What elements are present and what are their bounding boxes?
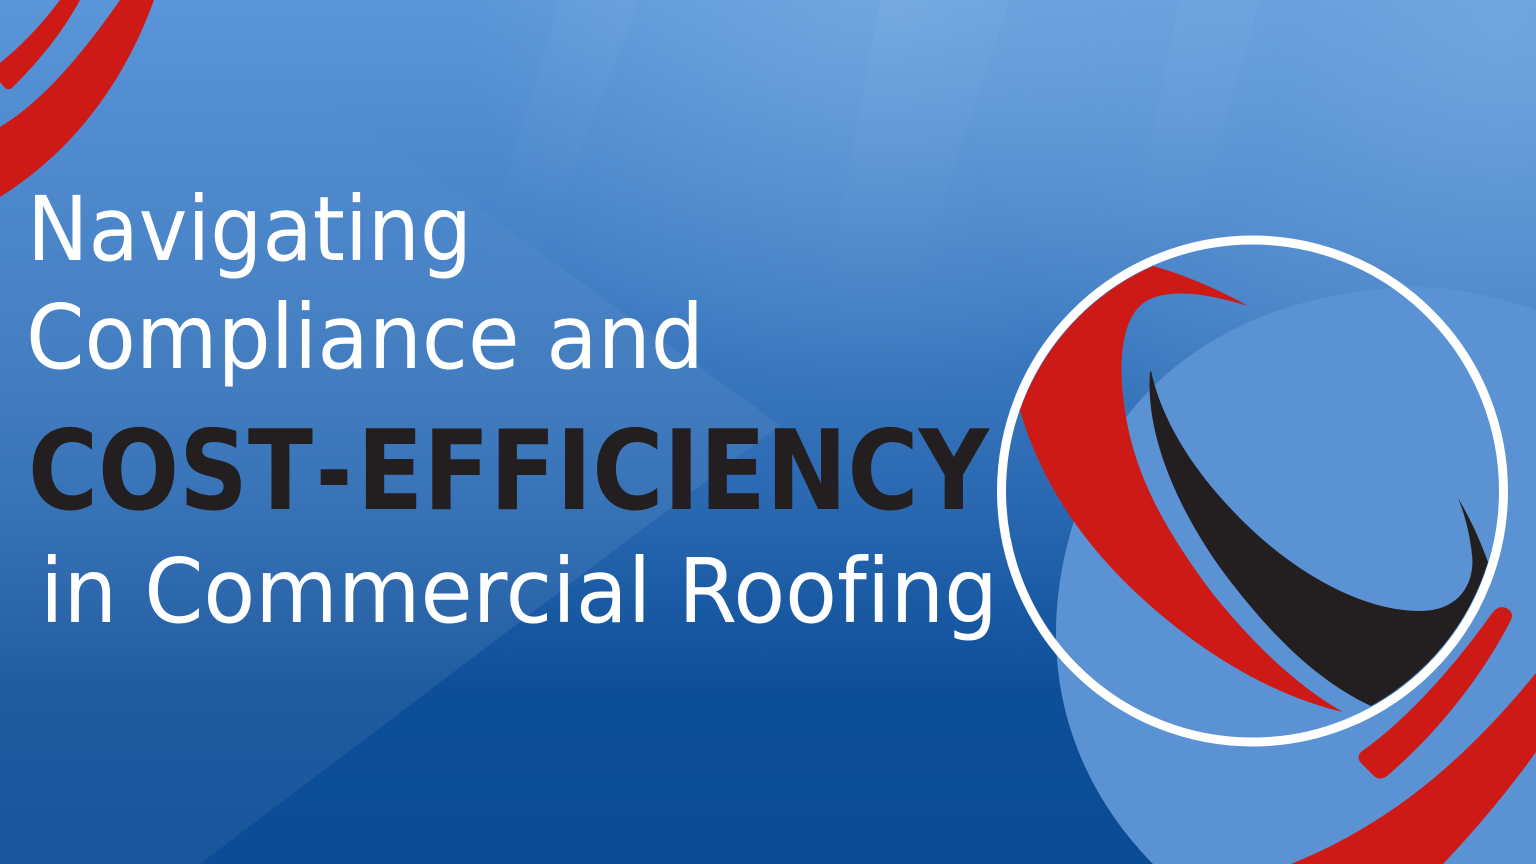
logo ring bbox=[1002, 240, 1504, 742]
small bar bbox=[1358, 607, 1512, 778]
title line 3 emphasis: EFFICIENCY bbox=[357, 407, 990, 536]
light blue backdrop circle bbox=[1056, 287, 1536, 864]
title line 3 emphasis: COST bbox=[28, 407, 313, 536]
large arc bbox=[0, 0, 154, 197]
title line 3 emphasis: - bbox=[316, 407, 352, 536]
logo red swoosh bbox=[1020, 266, 1343, 712]
large arc bbox=[1291, 673, 1536, 864]
logo black swoosh bbox=[1150, 371, 1488, 706]
title line 4: in Commercial Roofing bbox=[40, 539, 998, 643]
title line 3 emphasis bbox=[28, 407, 990, 536]
top-left red arcs bbox=[0, 0, 154, 197]
title line 1: Navigating bbox=[27, 177, 472, 281]
small arc bbox=[0, 0, 80, 89]
logo circle bbox=[1002, 240, 1504, 742]
title bbox=[26, 177, 998, 643]
bottom-right red arcs bbox=[1291, 607, 1536, 864]
title line 2: Compliance and bbox=[26, 285, 704, 389]
